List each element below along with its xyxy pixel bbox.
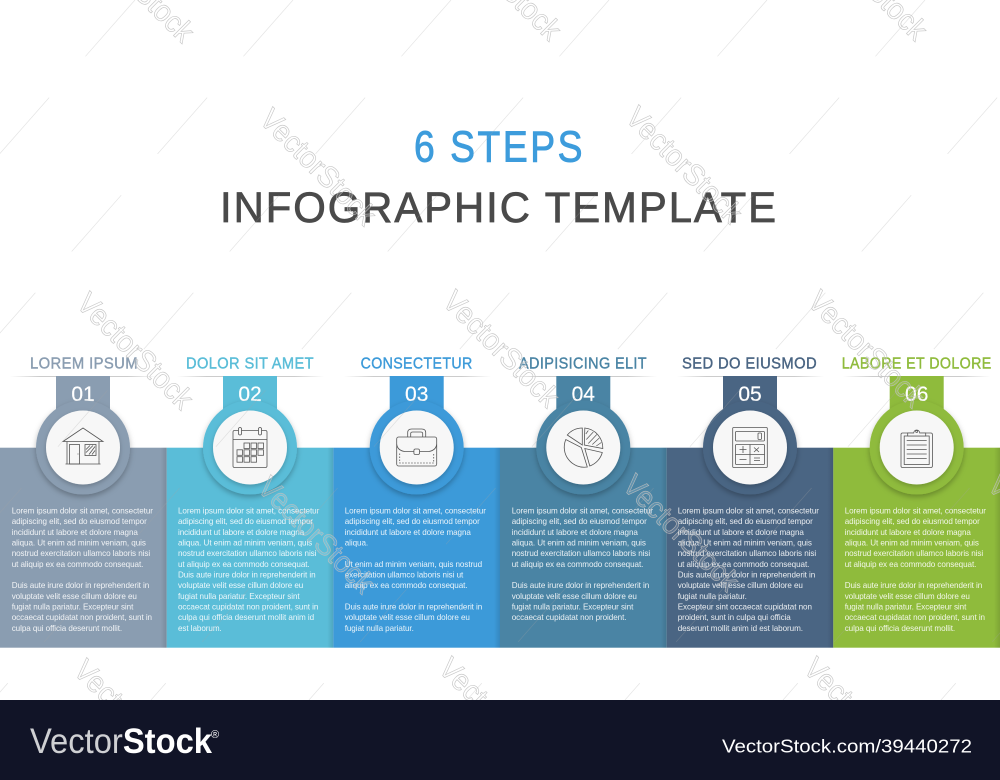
step 5 number tab: 05 xyxy=(738,383,762,406)
step 1 icon disc xyxy=(46,410,120,484)
step 3 body text: Ut enim ad minim veniam, quis nostrud xyxy=(345,560,482,569)
step 2 body text: ut aliquip ex ea commodo consequat. xyxy=(178,560,310,569)
step 3 ring xyxy=(370,400,464,494)
step 3 body text: Lorem ipsum dolor sit amet, consectetur xyxy=(345,506,486,516)
step 1 body text: culpa qui officia deserunt mollit. xyxy=(12,624,122,633)
step 4 body text: occaecat cupidatat non proident. xyxy=(512,613,626,622)
step 4 ring xyxy=(536,400,630,494)
step 3 body text: aliqua. xyxy=(345,539,368,548)
step 6 body text: culpa qui officia deserunt mollit. xyxy=(845,624,955,633)
step 5 body text: deserunt mollit anim id est laborum. xyxy=(678,624,803,633)
step 1 body text: aliqua. Ut enim ad minim veniam, quis xyxy=(12,539,146,548)
step 6 body text: Lorem ipsum dolor sit amet, consectetur xyxy=(845,506,986,516)
step 4 body text: fugiat nulla pariatur. Excepteur sint xyxy=(512,603,634,612)
step 1 body text: adipiscing elit, sed do eiusmod tempor xyxy=(12,517,147,526)
step 6 number tab: 06 xyxy=(905,383,928,406)
step 1 body text: occaecat cupidatat non proident, sunt in xyxy=(12,613,152,622)
step 1 body text: Duis aute irure dolor in reprehenderit in xyxy=(12,581,149,590)
step 1 ring xyxy=(36,400,130,494)
step 6 xyxy=(827,355,1000,648)
step 5 body text: fugiat nulla pariatur. xyxy=(678,592,747,601)
step 5 body text: nostrud exercitation ullamco laboris nisi xyxy=(678,549,816,558)
step 3 body text: aliquip ex ea commodo consequat. xyxy=(345,581,468,590)
step 3 body text: Duis aute irure dolor in reprehenderit in xyxy=(345,603,482,612)
step 1 body text: incididunt ut labore et dolore magna xyxy=(12,528,138,537)
step 4 body text: Lorem ipsum dolor sit amet, consectetur xyxy=(512,506,653,516)
step 4 number tab xyxy=(556,376,610,416)
step 5 xyxy=(661,355,833,648)
step 2 body text: est laborum. xyxy=(178,624,222,633)
watermark overlay: VectorStock xyxy=(616,469,746,599)
step 4 icon disc xyxy=(546,410,620,484)
step 2 body text: nostrud exercitation ullamco laboris nisi xyxy=(178,549,317,558)
step 5 body text: proident, sunt in culpa qui officia xyxy=(678,613,791,622)
footer image id: VectorStock.com/39440272 xyxy=(722,736,972,756)
step 1 number tab: 01 xyxy=(71,383,95,406)
step 4 body text: nostrud exercitation ullamco laboris nisi xyxy=(512,549,650,558)
icon: calculator xyxy=(733,428,767,468)
step 6 heading: LABORE ET DOLORE xyxy=(842,355,992,372)
step 5 ring xyxy=(703,400,797,494)
step 6 icon disc xyxy=(880,410,954,484)
step 2 body text: culpa qui officia deserunt mollit anim id xyxy=(178,613,314,622)
step 1 panel xyxy=(0,448,167,648)
watermark overlay: VectorStock xyxy=(436,285,566,415)
step 2 body text: incididunt ut labore et dolore magna xyxy=(178,528,305,537)
step 6 panel xyxy=(833,448,1000,648)
title line 1: 6 steps: 6 STEPS xyxy=(414,122,585,172)
step 5 number tab xyxy=(723,376,777,416)
icon: house xyxy=(63,428,103,464)
step 6 body text: nostrud exercitation ullamco laboris nisi xyxy=(845,549,983,558)
step 2 heading: DOLOR SIT AMET xyxy=(186,355,314,372)
watermark overlay: VectorStock xyxy=(801,285,931,415)
step 6 ring xyxy=(870,400,964,494)
step 5 body text: voluptate velit esse cillum dolore eu xyxy=(678,581,803,590)
step 2 ring xyxy=(203,400,297,494)
step 6 body text: occaecat cupidatat non proident, sunt in xyxy=(845,613,985,622)
step 5 body text: aliqua. Ut enim ad minim veniam, quis xyxy=(678,539,812,548)
step 3 xyxy=(327,355,500,648)
step 3 body text: fugiat nulla pariatur. xyxy=(345,624,414,633)
step 1 body text: nostrud exercitation ullamco laboris nisi xyxy=(12,549,150,558)
step 1 heading: LOREM IPSUM xyxy=(30,355,138,372)
step 4 body text: incididunt ut labore et dolore magna xyxy=(512,528,638,537)
step 2 body text: occaecat cupidatat non proident, sunt in xyxy=(178,603,318,612)
step 2 body text: Duis aute irure dolor in reprehenderit in xyxy=(178,571,316,580)
step 5 body text: incididunt ut labore et dolore magna xyxy=(678,528,804,537)
icon: clipboard xyxy=(901,430,932,468)
step 4 heading: ADIPISICING ELIT xyxy=(519,355,647,372)
step 2 number tab: 02 xyxy=(238,383,262,406)
step 2 body text: adipiscing elit, sed do eiusmod tempor xyxy=(178,517,313,526)
title xyxy=(220,122,778,232)
icon: briefcase xyxy=(397,429,437,466)
step 2 body text: fugiat nulla pariatur. Excepteur sint xyxy=(178,592,300,601)
step 6 body text: incididunt ut labore et dolore magna xyxy=(845,528,971,537)
step 4 body text: adipiscing elit, sed do eiusmod tempor xyxy=(512,517,647,526)
step 5 body text: Excepteur sint occaecat cupidatat non xyxy=(678,603,812,612)
step 2 panel xyxy=(167,448,333,648)
icon: pie chart xyxy=(564,428,603,467)
step 1 xyxy=(0,355,167,648)
step 4 body text: Duis aute irure dolor in reprehenderit in xyxy=(512,581,649,590)
step 3 body text: incididunt ut labore et dolore magna xyxy=(345,528,471,537)
step 2 body text: voluptate velit esse cillum dolore eu xyxy=(178,581,303,590)
step 4 body text: aliqua. Ut enim ad minim veniam, quis xyxy=(512,539,646,548)
step 6 body text: ut aliquip ex ea commodo consequat. xyxy=(845,560,976,569)
step 3 panel xyxy=(333,448,500,648)
step 5 icon disc xyxy=(713,410,787,484)
step 3 number tab: 03 xyxy=(405,383,428,406)
step 4 body text: voluptate velit esse cillum dolore eu xyxy=(512,592,637,601)
step 2 icon disc xyxy=(213,410,287,484)
step 1 body text: voluptate velit esse cillum dolore eu xyxy=(12,592,137,601)
step 4 body text: ut aliquip ex ea commodo consequat. xyxy=(512,560,643,569)
step 1 body text: Lorem ipsum dolor sit amet, consectetur xyxy=(12,506,153,516)
step 5 body text: Lorem ipsum dolor sit amet, consectetur xyxy=(678,506,819,516)
step 2 xyxy=(161,355,333,648)
step 1 body text: ut aliquip ex ea commodo consequat. xyxy=(12,560,143,569)
step 6 number tab xyxy=(890,376,944,416)
step 6 body text: adipiscing elit, sed do eiusmod tempor xyxy=(845,517,980,526)
step 6 body text: voluptate velit esse cillum dolore eu xyxy=(845,592,970,601)
step 6 body text: fugiat nulla pariatur. Excepteur sint xyxy=(845,603,967,612)
step 3 body text: voluptate velit esse cillum dolore eu xyxy=(345,613,470,622)
step 2 number tab xyxy=(223,376,277,416)
step 5 body text: ut aliquip ex ea commodo consequat. xyxy=(678,560,809,569)
step 6 body text: Duis aute irure dolor in reprehenderit in xyxy=(845,581,982,590)
watermark overlay: VectorStock xyxy=(70,287,200,417)
step 1 number tab xyxy=(56,376,110,416)
watermark overlay: VectorStock xyxy=(251,471,381,601)
step 6 body text: aliqua. Ut enim ad minim veniam, quis xyxy=(845,539,979,548)
step 3 body text: adipiscing elit, sed do eiusmod tempor xyxy=(345,517,480,526)
step 5 panel xyxy=(667,448,833,648)
footer logo: VectorStock xyxy=(30,722,212,761)
step 4 panel xyxy=(500,448,667,648)
step 1 body text: fugiat nulla pariatur. Excepteur sint xyxy=(12,603,134,612)
step 4 number tab: 04 xyxy=(572,383,595,406)
step 5 body text: Duis aute irure dolor in reprehenderit in xyxy=(678,571,815,580)
step 5 heading: SED DO EIUSMOD xyxy=(682,355,817,372)
watermark overlay: VectorStock xyxy=(253,103,383,233)
step 5 body text: adipiscing elit, sed do eiusmod tempor xyxy=(678,517,813,526)
watermark overlay: VectorStock xyxy=(619,101,749,231)
step 4 xyxy=(494,355,667,648)
icon: calendar xyxy=(233,428,267,468)
step 3 icon disc xyxy=(380,410,454,484)
step 3 number tab xyxy=(390,376,444,416)
footer bar xyxy=(0,700,1000,780)
title line 2: infographic template: INFOGRAPHIC TEMPLATE xyxy=(220,184,778,232)
step 2 body text: Lorem ipsum dolor sit amet, consectetur xyxy=(178,506,320,516)
step 3 heading: CONSECTETUR xyxy=(361,355,473,372)
step 3 body text: exercitation ullamco laboris nisi ut xyxy=(345,571,464,580)
step 2 body text: aliqua. Ut enim ad minim veniam, quis xyxy=(178,539,312,548)
footer registered mark: ® xyxy=(211,729,219,741)
